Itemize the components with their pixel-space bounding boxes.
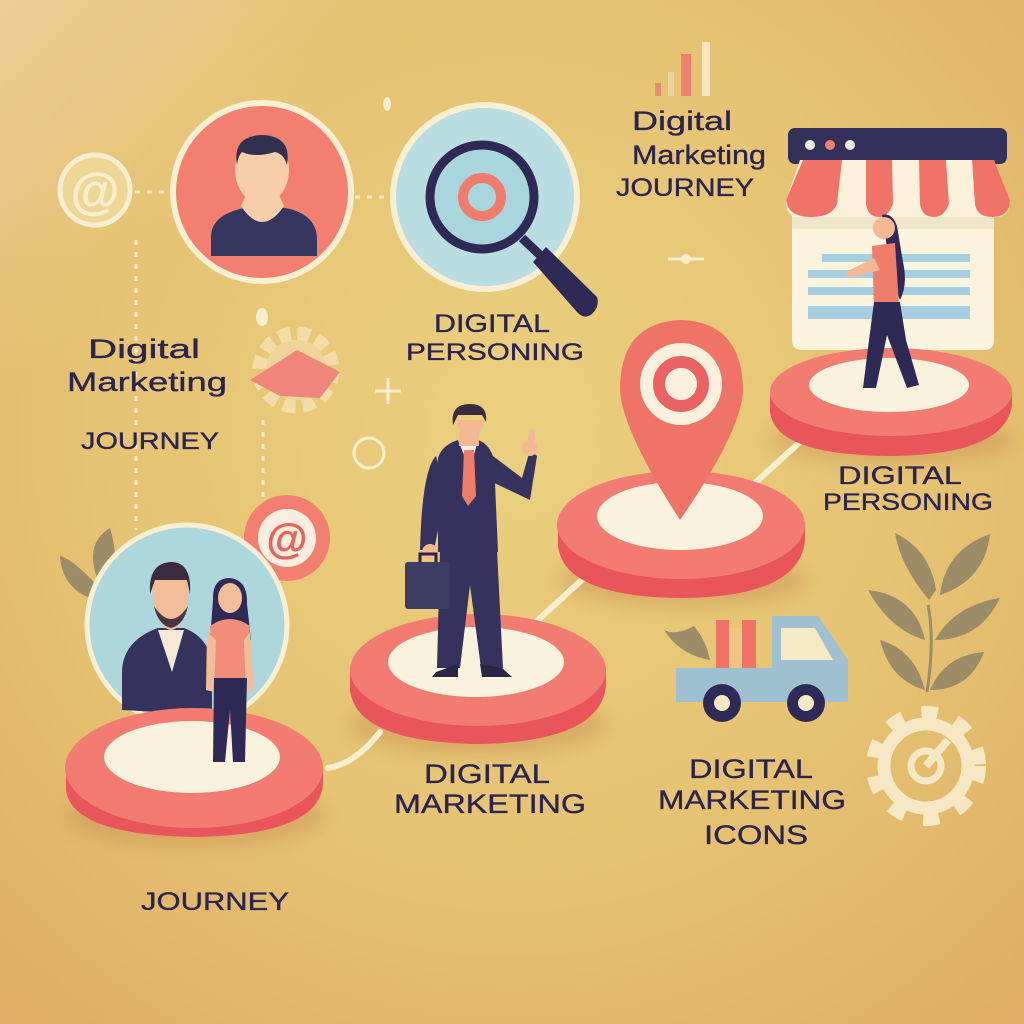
label: digital personing center: DIGITAL: [434, 310, 550, 338]
soft shadows under platforms: [65, 416, 1014, 847]
label: digital personing center: PERSONING: [406, 339, 584, 366]
icon: storefront: [786, 128, 1010, 350]
icon: sparkles: [256, 97, 704, 468]
icon: target badge: [244, 495, 330, 581]
icon: leaves right: [868, 533, 1000, 692]
icon: magnifier circle: [393, 105, 598, 317]
platform: pin: [557, 471, 805, 598]
platform: couple: [65, 708, 323, 837]
title: digital marketing journey: JOURNEY: [616, 174, 754, 202]
label: digital marketing journey left: JOURNEY: [81, 428, 219, 455]
label: journey bottom: JOURNEY: [141, 888, 289, 916]
label: digital marketing bottom center: [394, 759, 586, 819]
label: digital marketing icons: [658, 754, 846, 850]
label: digital marketing icons: MARKETING: [658, 785, 846, 815]
figure: walking woman: [846, 214, 919, 388]
icon: target badge: @: [267, 515, 307, 562]
icon: top bar chart: [655, 42, 710, 96]
icon: at sign: [60, 155, 130, 225]
title: digital marketing journey: Marketing: [632, 140, 766, 170]
icon: location pin: [620, 320, 743, 520]
label: digital marketing bottom center: MARKETING: [394, 789, 586, 819]
connector: dotted paths: [135, 192, 390, 530]
icon: leaves left: [60, 528, 115, 600]
title: digital marketing journey: [616, 106, 766, 202]
platform: businessman: [350, 614, 606, 744]
label: digital marketing bottom center: DIGITAL: [424, 759, 550, 789]
icon: delivery truck: [664, 616, 848, 722]
title: digital marketing journey: Digital: [632, 106, 732, 136]
figure: businessman: [405, 404, 538, 677]
label: digital marketing icons: ICONS: [704, 820, 808, 850]
label: digital marketing journey left: Marketing: [67, 367, 227, 397]
icon: gear bottom right: [873, 713, 979, 819]
icon: gear with arrow: [250, 334, 340, 406]
icon: couple circle: [87, 525, 287, 725]
label: digital marketing journey left: Digital: [88, 334, 200, 364]
figure: woman standing: [206, 578, 254, 762]
label: digital marketing icons: DIGITAL: [689, 754, 813, 784]
platform: store: [770, 348, 1012, 456]
label: digital marketing journey left: [67, 334, 227, 455]
label: digital personing right: DIGITAL: [838, 462, 962, 490]
icon: person avatar circle: [173, 103, 351, 281]
label: digital personing right: PERSONING: [823, 489, 993, 516]
icon: at sign: @: [71, 163, 119, 219]
label: digital personing center: [406, 310, 584, 366]
label: digital personing right: [823, 462, 993, 516]
connector: path segments between platforms: [328, 442, 800, 768]
